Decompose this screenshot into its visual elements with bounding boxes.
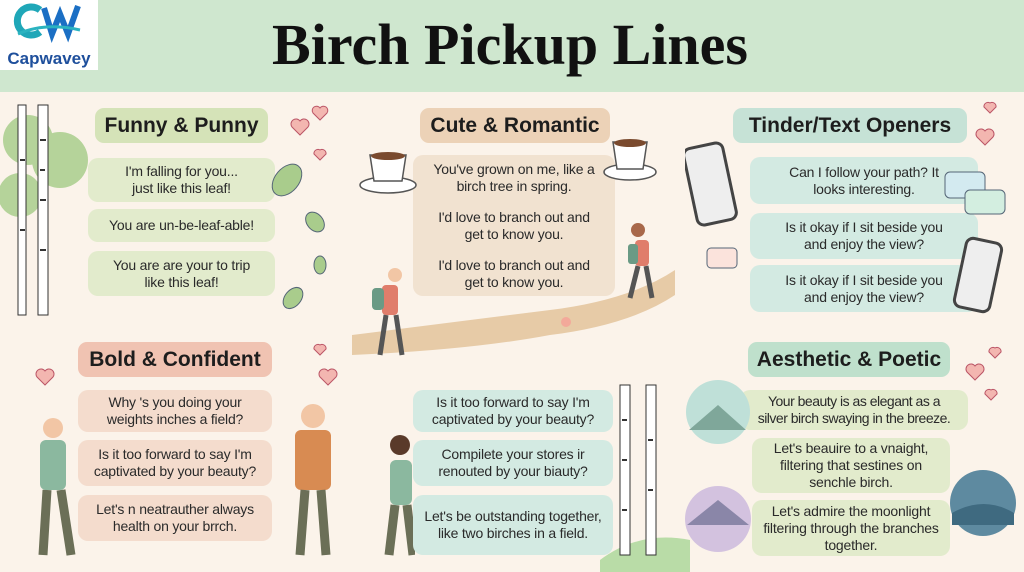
panel: middle bottom lines [413,390,613,555]
heading: tinder: Tinder/Text Openers [749,114,951,136]
heading: bold: Bold & Confident [89,348,261,370]
line 1: Your beauty is as elegant as a [768,393,940,409]
panel: bold & confident [78,342,272,541]
line 2: and enjoy the view? [804,236,924,252]
line 2: Compilete your stores ir [441,446,585,462]
line 2 [88,209,275,242]
header band [0,0,1024,92]
line 1: silver birch swaying in the breeze. [758,410,950,426]
heading: bold [78,342,272,377]
line 3: like two birches in a field. [438,525,588,541]
icon: hearts aesthetic [966,346,1002,401]
line 2 [750,213,978,259]
lines box: You've grown on me, like a [433,160,595,176]
line 3 [413,495,613,555]
heading: cute [420,108,610,143]
line 1: captivated by your beauty? [432,411,594,427]
lines box: get to know you. [465,226,563,242]
line 1: just like this leaf! [132,180,231,196]
panel: cute & romantic [413,108,615,296]
illustration: birch trees bottom [600,384,690,572]
line 3 [78,495,272,541]
line 3: Is it okay if I sit beside you [785,272,943,288]
icon: coffee cups [359,139,657,194]
panel: tinder/text openers [733,108,978,312]
line 3: Let's n neatrauther always [96,501,254,517]
line 3 [750,265,978,312]
heading: tinder [733,108,967,143]
line 3: health on your brrch. [113,518,237,534]
line 2: filtering that sestines on [780,457,922,473]
line 2: You are un-be-leaf-able! [109,217,254,233]
line 1: Why 's you doing your [108,394,242,410]
line 1 [88,158,275,202]
line 3 [88,251,275,296]
line 3: Let's be outstanding together, [424,508,602,524]
line 3: Let's admire the moonlight [772,502,930,518]
line 2: Is it okay if I sit beside you [785,219,943,235]
line 3: You are are your to trip [113,256,250,272]
line 1: looks interesting. [813,180,915,196]
heading: funny [95,108,268,143]
lines box: I'd love to branch out and [438,256,590,272]
icon: hearts and leaves [272,106,328,310]
heading: cute: Cute & Romantic [430,114,600,136]
line 1: weights inches a field? [107,411,243,427]
line 1: I'm falling for you... [125,163,238,179]
heading: funny: Funny & Punny [104,114,258,136]
panel: funny & punny [88,108,275,296]
line 2 [413,440,613,486]
line 2 [78,440,272,486]
lines box: birch tree in spring. [457,178,571,194]
line 1 [740,390,968,430]
line 3: together. [825,536,877,552]
line 1 [413,390,613,432]
line 2: Is it too forward to say I'm [98,446,252,462]
line 3: like this leaf! [144,274,219,290]
panel: aesthetic & poetic [744,342,968,556]
line 2: captivated by your beauty? [94,463,256,479]
title: Birch Pickup Lines [272,12,748,77]
heading: aesthetic [748,342,950,377]
line 3: filtering through the branches [763,520,939,536]
line 2 [752,438,950,493]
icon: hearts mid [36,344,338,386]
line 2: renouted by your biauty? [438,463,588,479]
heading: aesthetic: Aesthetic & Poetic [757,348,941,370]
icon: phones and chat [685,142,1006,314]
illustration: path with hikers [352,223,675,356]
line 3 [752,500,950,556]
line 1: Is it too forward to say I'm [436,394,590,410]
lines box [413,155,615,296]
lines box: get to know you. [465,274,563,290]
line 3: and enjoy the view? [804,288,924,304]
illustration: hikers bottom [38,404,415,556]
line 1 [750,157,978,204]
line 1: Can I follow your path? It [789,164,939,180]
logo: Capwavey [7,49,91,68]
icon: landscape circles [685,380,1016,552]
line 1 [78,390,272,432]
decor: left birch tree [0,104,88,316]
logo [0,0,98,70]
lines box: I'd love to branch out and [438,208,590,224]
icon: hearts right [976,102,997,146]
line 2: senchle birch. [809,474,893,490]
line 2: Let's beauire to a vnaight, [774,440,928,456]
